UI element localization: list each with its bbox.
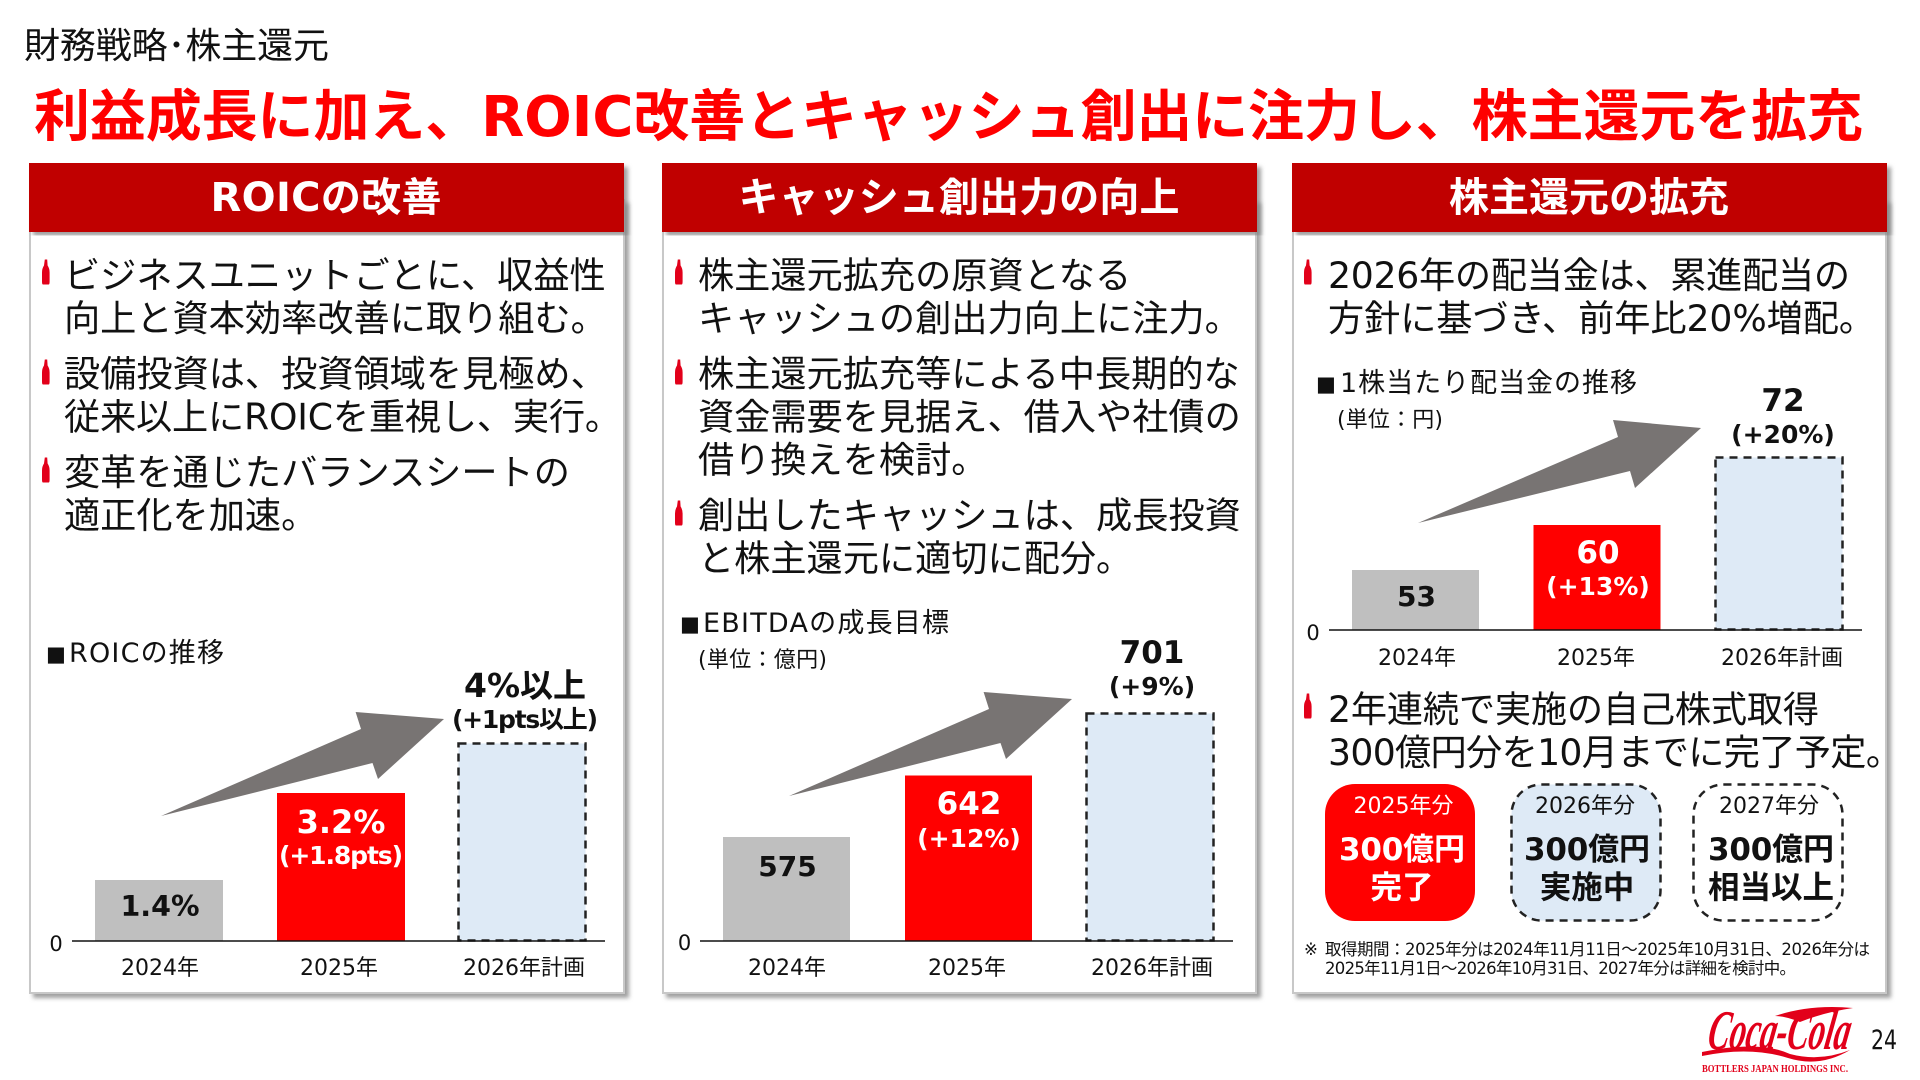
bar chart: dividend: 2026年計画 [1721, 646, 1843, 671]
chart heading: 1株当たり配当金の推移 [1340, 368, 1637, 399]
unit note: (単位：円) [1337, 408, 1443, 433]
panel heading: cash generation: キャッシュ創出力の向上 [738, 175, 1180, 221]
bullet text 1: 方針に基づき、前年比20%増配。 [1328, 297, 1875, 340]
bullet text 1 [64, 254, 607, 340]
bullet text 3 [64, 451, 570, 537]
bullet text: buyback: 2年連続で実施の自己株式取得 [1328, 688, 1819, 731]
bullet text 1: ビジネスユニットごとに、収益性 [64, 254, 606, 297]
bullet text 2: 従来以上にROICを重視し、実行。 [64, 396, 621, 438]
bar chart: EBITDA: 2024年 [748, 956, 826, 981]
bar chart: EBITDA: 2026年計画 [1091, 956, 1213, 981]
bullet text 1 [1328, 254, 1875, 340]
bar chart: ROIC: 2025年 [300, 956, 378, 981]
chart heading: EBITDAの成長目標 [703, 608, 949, 639]
bar chart: EBITDA: 575 [758, 850, 817, 883]
footnote: 取得期間：2025年分は2024年11月11日～2025年10月31日、2026年分は [1325, 940, 1870, 959]
section label: 財務戦略･株主還元 [24, 26, 329, 67]
icon: bottle bullet [1304, 260, 1312, 284]
arrow: growth [1418, 420, 1701, 523]
bar chart: ROIC: 1.4% [120, 890, 200, 923]
logo: Coca-Cola Bottlers Japan Holdings [1702, 1000, 1857, 1075]
panel heading: ROIC improvement: ROICの改善 [210, 175, 442, 221]
icon: bottle bullet [675, 260, 683, 284]
bullet text 2: 株主還元拡充等による中長期的な [698, 352, 1240, 396]
arrow: growth [789, 692, 1072, 796]
panel heading: shareholder returns [1292, 163, 1887, 232]
panel: cash generation [662, 163, 1257, 993]
chart heading: ■ [680, 612, 700, 636]
buyback card: 2025 [1325, 784, 1475, 921]
bullet text 3: 創出したキャッシュは、成長投資 [698, 494, 1241, 537]
icon: bottle bullet [42, 260, 50, 284]
bar chart: EBITDA: (+9%) [1109, 672, 1195, 701]
footnote: ※ [1304, 940, 1318, 959]
bar chart: ROIC: 3.2% [297, 803, 385, 841]
buyback card: 2027: 相当以上 [1708, 870, 1834, 906]
bar chart: dividend: 2024年 [1378, 646, 1456, 671]
bullet text 1: 株主還元拡充の原資となる [698, 254, 1131, 297]
chart heading: ■ [46, 642, 66, 666]
bullet text 2: 設備投資は、投資領域を見極め、 [64, 352, 607, 396]
bullet text 2 [698, 352, 1241, 482]
icon: bottle bullet [42, 458, 50, 482]
buyback card: 2027 [1694, 784, 1842, 920]
bar chart: dividend: (+20%) [1731, 420, 1835, 449]
title: 利益成長に加え、ROIC改善とキャッシュ創出に注力し、株主還元を拡充 [34, 85, 1863, 150]
panel heading: ROIC improvement [29, 163, 624, 232]
icon: bottle bullet [675, 500, 683, 526]
icon: bottle bullet [675, 360, 683, 384]
bar chart: dividend: 0 [1306, 621, 1320, 645]
bar chart: dividend: 72 [1761, 383, 1805, 419]
buyback card: 2026: 2026年分 [1535, 794, 1635, 819]
bullet text 3 [698, 494, 1241, 580]
bar chart: EBITDA [678, 635, 1233, 981]
buyback card: 2026 [1512, 784, 1660, 920]
bullet text 2: 借り換えを検討。 [698, 438, 988, 482]
unit note: (単位：億円) [698, 648, 827, 673]
footnote: 2025年11月1日～2026年10月31日、2027年分は詳細を検討中。 [1325, 959, 1796, 978]
bar chart: ROIC [49, 666, 605, 981]
panel heading: shareholder returns: 株主還元の拡充 [1449, 175, 1729, 221]
buyback card: 2027: 2027年分 [1719, 794, 1819, 819]
panel heading: cash generation [662, 163, 1257, 232]
bar chart: dividend: 2025年 [1557, 646, 1635, 671]
panel: ROIC improvement [29, 163, 624, 993]
buyback card: 2027: 300億円 [1708, 832, 1834, 868]
bullet text 2: 資金需要を見据え、借入や社債の [698, 396, 1241, 438]
bullet text 3: 変革を通じたバランスシートの [64, 451, 570, 494]
bar chart: EBITDA: (+12%) [917, 824, 1021, 853]
buyback card: 2026: 300億円 [1524, 832, 1650, 868]
icon: bottle bullet [1304, 694, 1312, 718]
bar chart: EBITDA: 642 [937, 786, 1001, 822]
footnote [1304, 940, 1870, 978]
buyback card: 2025: 2025年分 [1354, 794, 1454, 819]
buyback card: 2026: 実施中 [1540, 870, 1634, 906]
panel: shareholder returns [1292, 163, 1902, 993]
bar chart: ROIC: 4%以上 [464, 666, 586, 705]
bullet text 1 [698, 254, 1241, 340]
bar chart: ROIC: 2026年計画 [463, 956, 585, 981]
arrow: growth [161, 712, 444, 816]
bar chart: ROIC: (+1pts以上) [452, 705, 598, 734]
chart heading: ROICの推移 [69, 638, 224, 669]
page number: 24 [1871, 1025, 1897, 1056]
logo: Coca-Cola Bottlers Japan Holdings: BOTTLERS JAPAN HOLDINGS INC. [1702, 1064, 1848, 1075]
buyback card: 2025: 300億円 [1339, 832, 1465, 868]
bar chart: dividend: 53 [1397, 580, 1436, 613]
bullet text 2 [64, 352, 621, 438]
bar chart: dividend: (+13%) [1546, 572, 1650, 601]
bar chart: dividend: 60 [1576, 535, 1620, 571]
chart heading: ■ [1316, 372, 1336, 396]
icon: bottle bullet [42, 360, 50, 384]
bullet text 1: 向上と資本効率改善に取り組む。 [64, 297, 607, 340]
bullet text: buyback [1328, 688, 1902, 774]
bar chart: ROIC: (+1.8pts) [279, 841, 403, 870]
bar chart: EBITDA: 0 [678, 931, 691, 955]
bullet text 3: 適正化を加速。 [64, 494, 317, 537]
bullet text 1: 2026年の配当金は、累進配当の [1328, 254, 1850, 297]
bar chart: ROIC: 0 [49, 932, 63, 956]
bullet text: buyback: 300億円分を10月までに完了予定。 [1328, 731, 1902, 774]
buyback card: 2025: 完了 [1370, 870, 1434, 906]
bullet text 3: と株主還元に適切に配分。 [698, 537, 1132, 580]
bar chart: ROIC: 2024年 [121, 956, 199, 981]
bar chart: EBITDA: 2025年 [928, 956, 1006, 981]
bar chart: EBITDA: 701 [1120, 635, 1184, 671]
bullet text 1: キャッシュの創出力向上に注力。 [698, 297, 1241, 340]
bar chart: dividend [1306, 383, 1862, 671]
